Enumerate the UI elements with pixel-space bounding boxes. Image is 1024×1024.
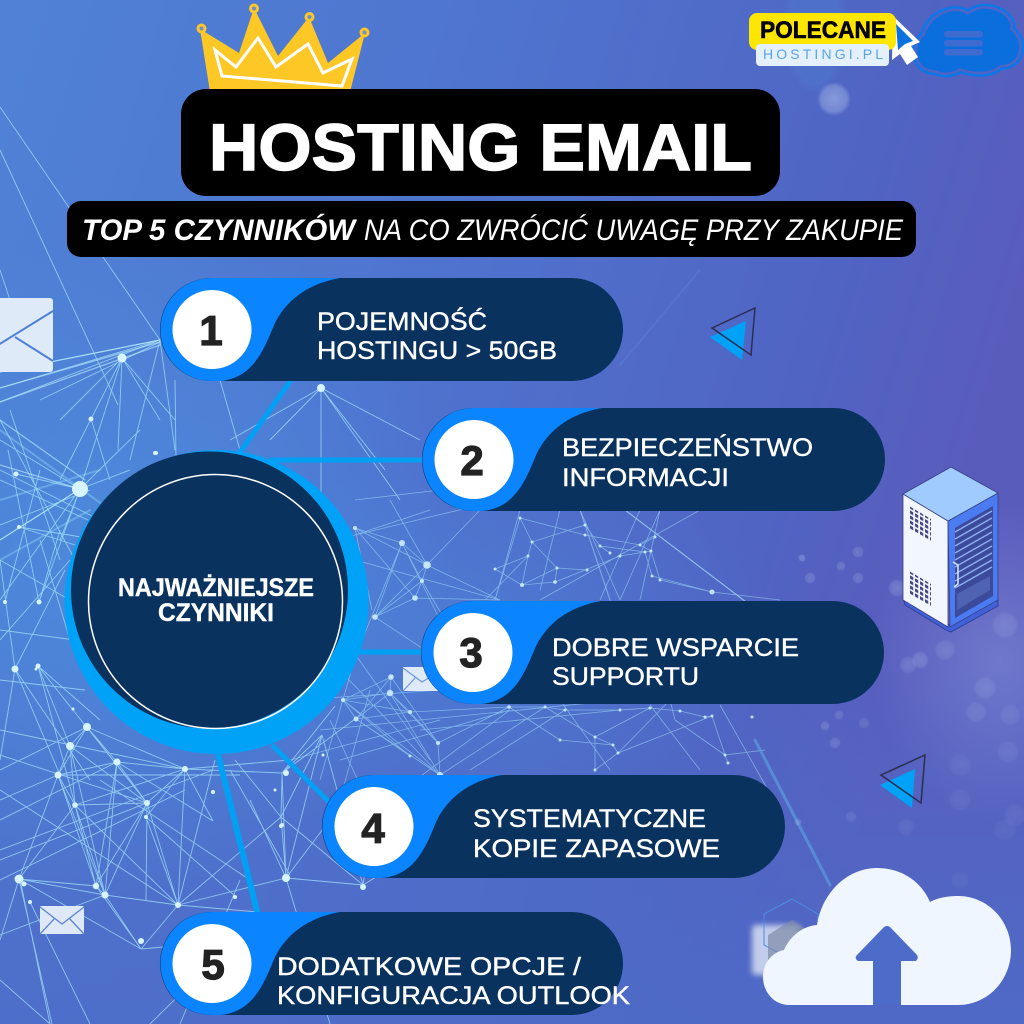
upload cloud icon [763,868,1011,1005]
number 4: 4 [361,805,385,852]
pill 4 label: SYSTEMATYCZNE [473,805,706,833]
envelope icon bottom left [40,906,84,934]
network background: bright strands [0,270,830,885]
pill 3 label: SUPPORTU [552,663,699,691]
pill 2 [422,408,885,511]
logo text hostingi: HOSTINGI.PL [763,46,883,62]
subtitle regular text: NA CO ZWRÓCIĆ UWAGĘ PRZY ZAKUPIE [364,214,904,247]
pill 2 label: BEZPIECZEŃSTWO [562,433,813,462]
network background: left cluster lines [0,107,420,1024]
logo text polecane: POLECANE [760,17,886,44]
number 5: 5 [201,941,225,988]
triangle icon top [710,308,755,360]
connector lines [217,380,430,915]
faded square behind cloud [752,899,818,975]
pill 2 label: INFORMACJI [562,464,729,492]
central circle text: NAJWAŻNIEJSZE [118,574,314,602]
pill 5 [160,912,630,1015]
logo cursor [892,16,920,65]
network background: nodes [3,354,366,944]
subtitle bold text: TOP 5 CZYNNIKÓW [82,213,358,247]
pill 1 label: HOSTINGU > 50GB [317,337,557,365]
bokeh lights [794,82,1024,890]
logo badge [749,13,896,66]
crown icon [198,5,368,92]
pill 5 label: DODATKOWE OPCJE / [277,953,581,981]
envelope icon left [0,298,53,372]
server rack icon [903,467,998,632]
title box [181,89,780,196]
network background: center nodes [341,516,754,778]
pill 1 [160,278,623,381]
subtitle bar [67,201,916,257]
number 3: 3 [459,629,483,676]
central circle text: CZYNNIKI [158,599,274,627]
upload arrow [856,926,918,1005]
envelope icon center [403,667,445,691]
pill 3 [421,601,884,704]
number 1: 1 [199,307,223,354]
network background: center cluster lines [290,490,780,850]
triangle icon bottom [880,755,925,808]
pill 5 label: KONFIGURACJA OUTLOOK [277,982,630,1010]
title text: HOSTING EMAIL [209,110,752,184]
pill 4 label: KOPIE ZAPASOWE [473,835,720,863]
number 2: 2 [460,437,484,484]
pill 1 label: POJEMNOŚĆ [317,306,487,336]
pill 4 [322,775,785,878]
pill 3 label: DOBRE WSPARCIE [552,634,799,662]
logo cloud [917,9,1019,72]
central circle [64,450,368,754]
